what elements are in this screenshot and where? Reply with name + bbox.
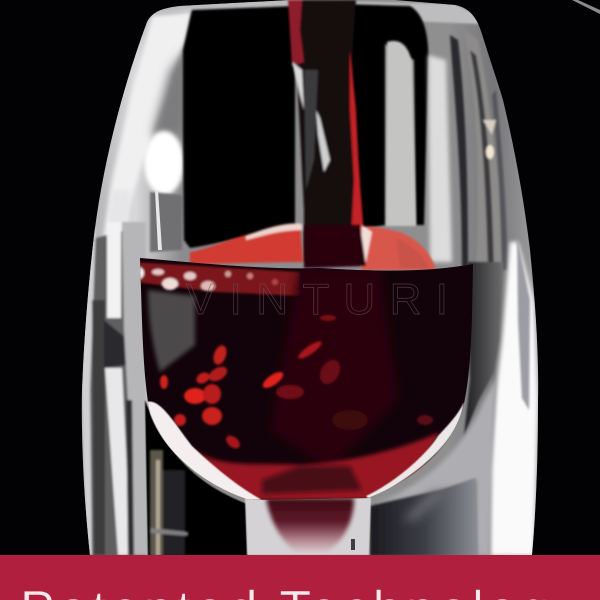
right grey streak — [517, 236, 530, 410]
wine bottom glow — [185, 432, 440, 500]
diagonal light band — [372, 378, 496, 556]
right grey fill beside bowl — [464, 262, 503, 436]
glass body — [80, 0, 540, 560]
top rim — [150, 0, 480, 24]
dark area beside stream — [350, 2, 430, 228]
foam and splash — [190, 224, 436, 270]
bowl left grey reflection — [148, 290, 195, 372]
wine bowl — [130, 250, 480, 505]
wine in stem — [266, 498, 354, 552]
left white crescent — [146, 402, 262, 500]
right white crescent — [366, 402, 464, 500]
right streaks — [450, 30, 508, 270]
right light band — [386, 41, 416, 226]
lower centre dark — [145, 400, 250, 560]
lower right dark — [370, 478, 478, 556]
red caption band — [0, 555, 600, 600]
left lower reflections — [111, 192, 130, 221]
bright red swirls — [160, 315, 433, 451]
faint diagonal glow — [403, 490, 450, 520]
dark patch bottom — [262, 466, 362, 494]
lower left streak — [150, 450, 188, 558]
stem mark — [351, 539, 355, 550]
wine stream — [288, 0, 366, 262]
deep red wine mass — [270, 268, 398, 470]
stem — [245, 498, 371, 555]
wine aerator photograph — [82, 0, 600, 555]
band of bubbles — [132, 262, 300, 296]
right light band two — [428, 55, 452, 262]
upper left grey transition — [152, 50, 186, 135]
right white band — [490, 242, 538, 556]
left glow spot — [144, 131, 184, 195]
central dark interior — [183, 6, 295, 248]
top right corner — [572, 0, 600, 14]
engraved logo: VINTURI — [186, 275, 448, 324]
left bright reflection — [102, 10, 192, 236]
left side lower strips — [82, 222, 150, 557]
